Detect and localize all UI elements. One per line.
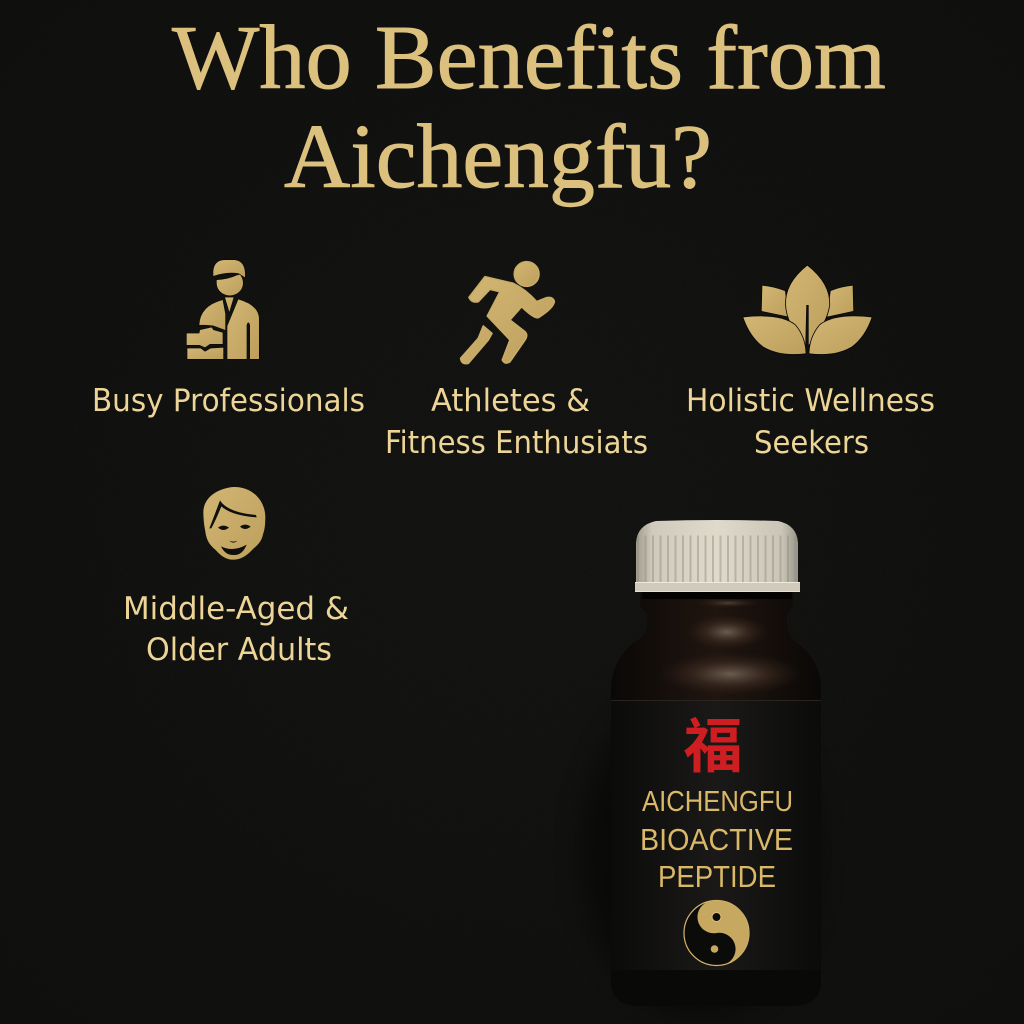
product name: PEPTIDE <box>658 859 776 894</box>
product name <box>640 786 793 894</box>
product name: BIOACTIVE <box>640 822 793 857</box>
icon: runner <box>461 262 554 364</box>
bottle label panel <box>611 700 821 970</box>
product name: AICHENGFU <box>642 786 793 818</box>
label: athletes and fitness enthusiasts: Athletes & <box>431 383 590 419</box>
bottle <box>582 520 821 1015</box>
label: busy professionals: Busy Professionals <box>92 383 365 419</box>
bottle cap <box>635 520 800 592</box>
bottle body <box>611 592 821 1006</box>
icon: lotus <box>743 266 872 354</box>
label: middle-aged and older adults: Older Adults <box>146 632 332 668</box>
label: holistic wellness seekers: Seekers <box>754 425 869 461</box>
bottle base <box>611 970 821 1006</box>
yin-yang symbol <box>684 895 754 968</box>
icon: busy professional <box>187 260 259 359</box>
label: middle-aged and older adults: Middle-Aged & <box>123 591 349 627</box>
title <box>172 7 886 207</box>
red fu character: 福 <box>683 699 743 784</box>
label: athletes and fitness enthusiasts: Fitness Enthusiats <box>385 425 648 461</box>
title: Who Benefits from <box>172 7 886 108</box>
label: middle-aged and older adults <box>123 591 349 668</box>
label: holistic wellness seekers <box>686 383 935 461</box>
title: Aichengfu? <box>284 106 712 207</box>
label: athletes and fitness enthusiasts <box>385 383 648 461</box>
glass highlights <box>642 592 802 696</box>
icon: middle-aged face <box>203 487 265 560</box>
label: holistic wellness seekers: Holistic Wellness <box>686 383 935 419</box>
